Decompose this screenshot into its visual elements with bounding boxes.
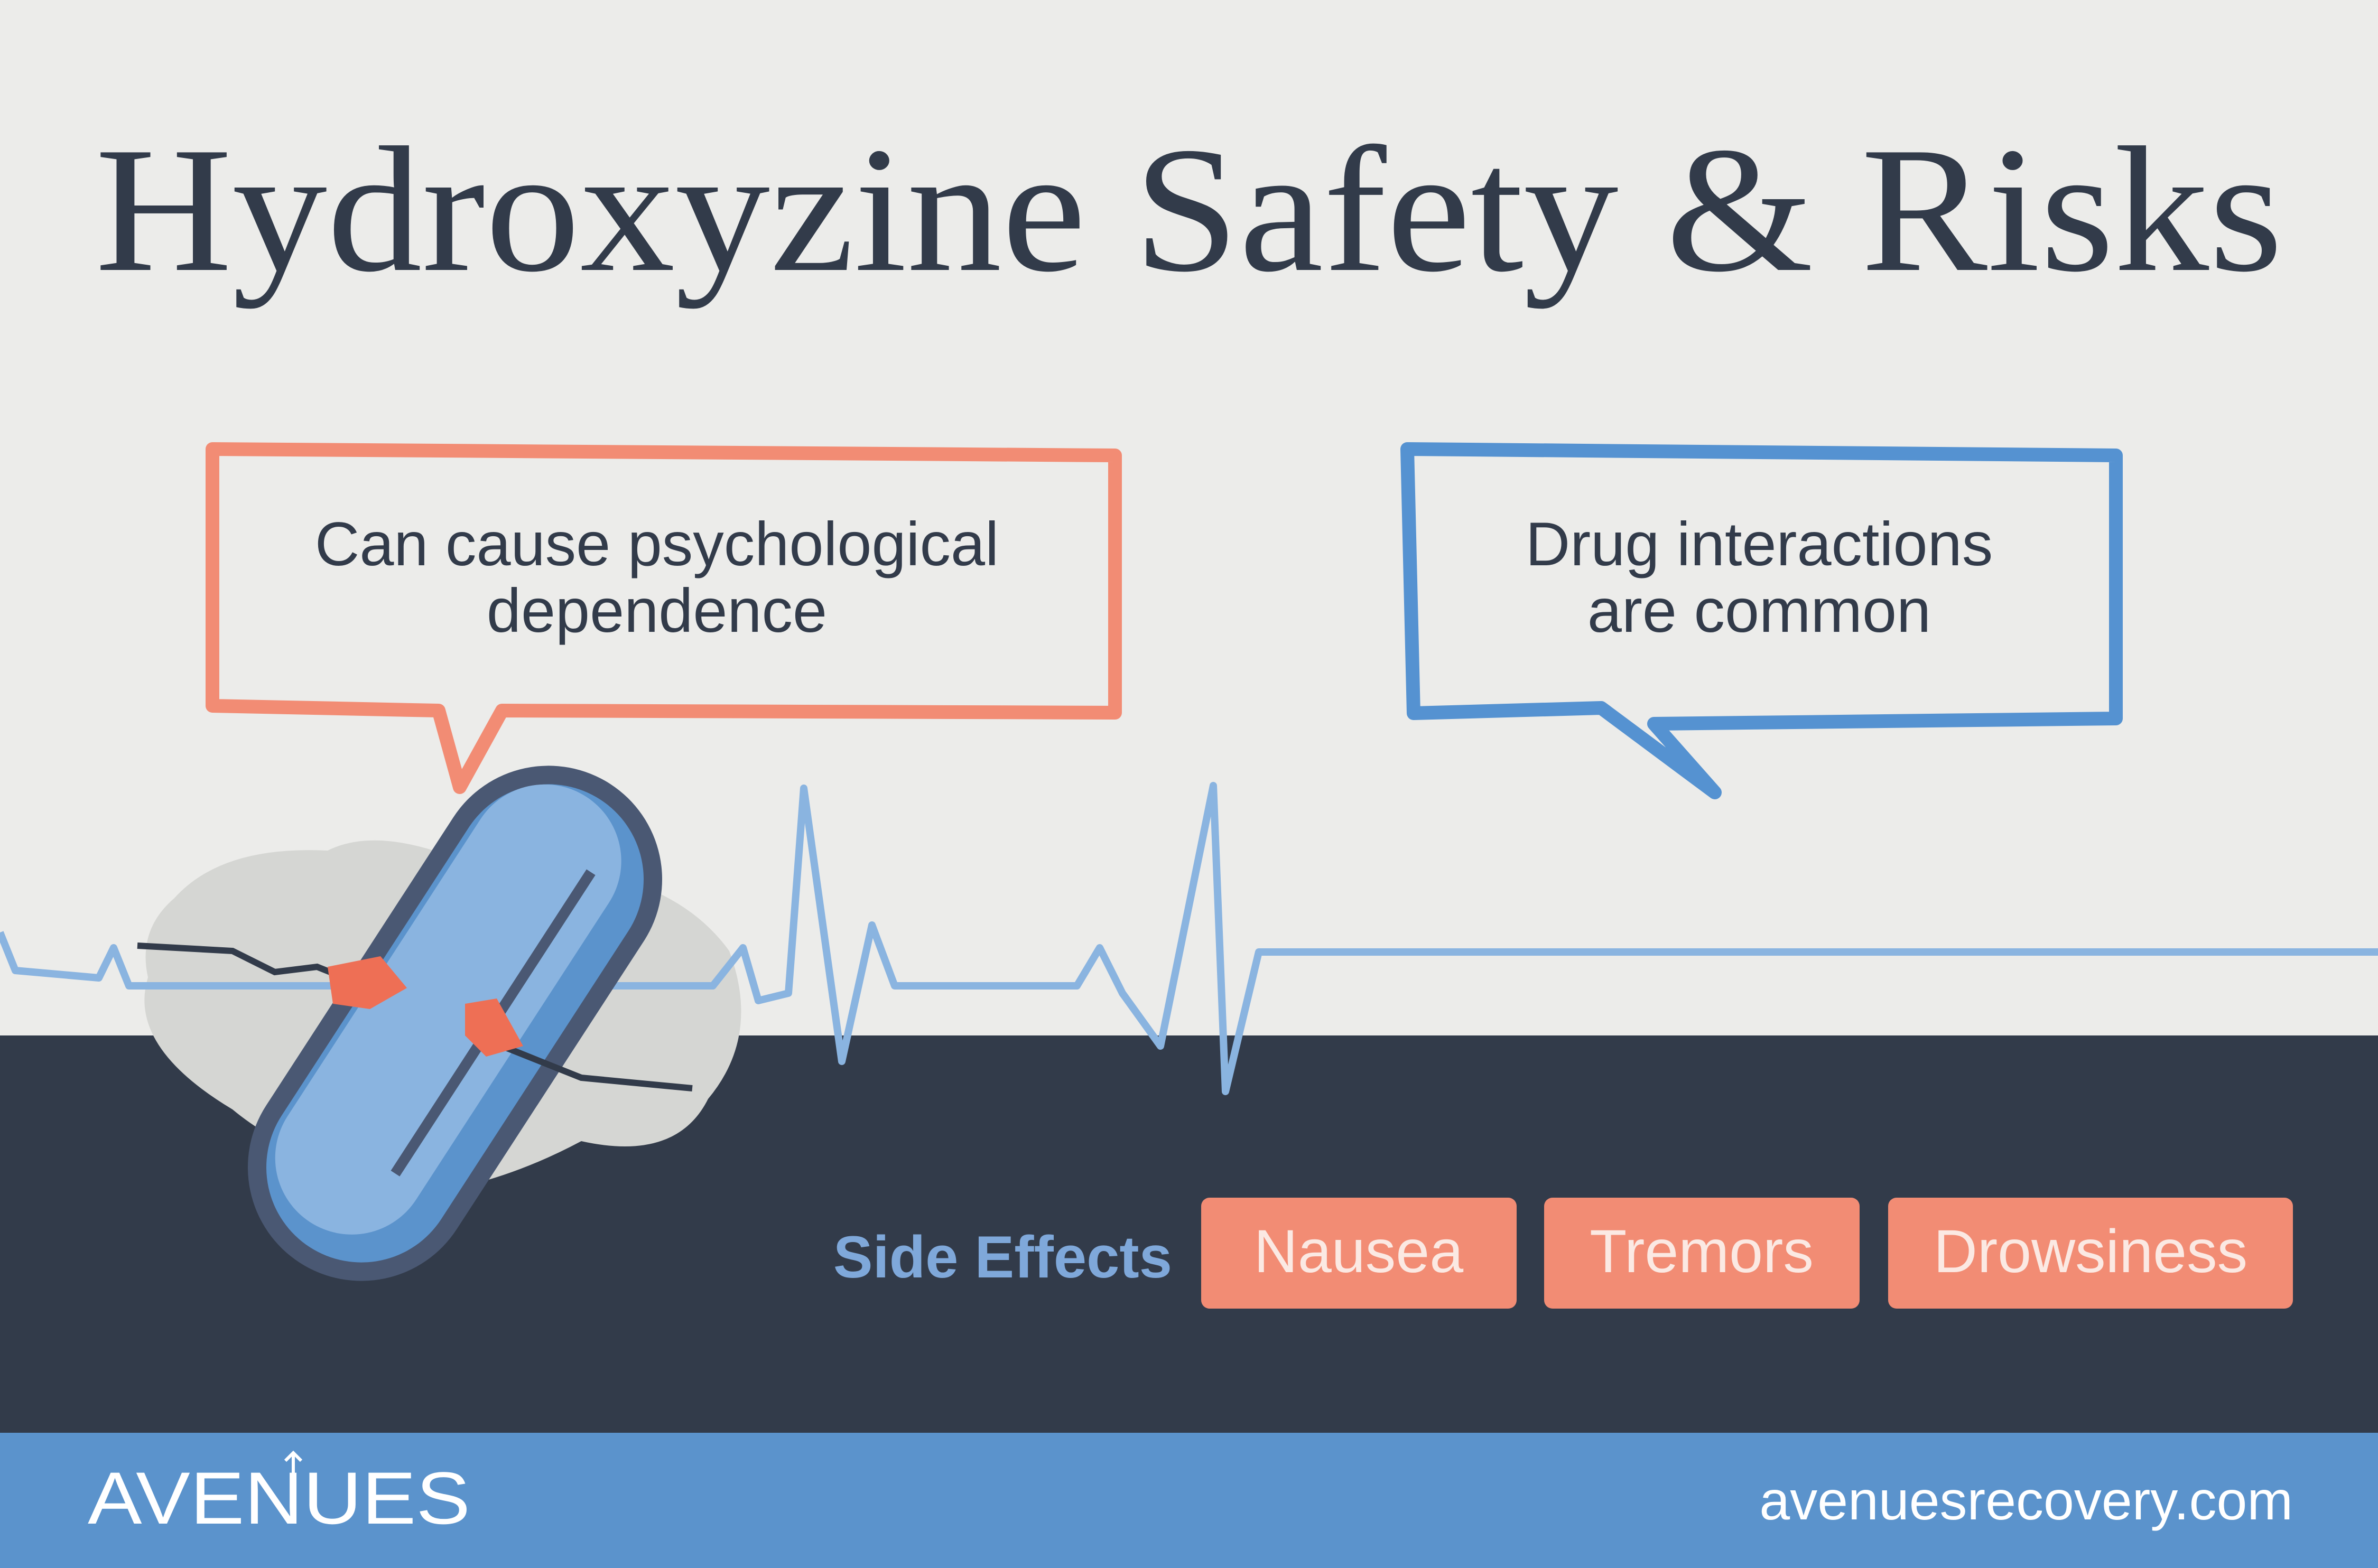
- tag: Tremors: [1544, 1198, 1860, 1309]
- callout: drug interactions: Drug interactions: [1526, 509, 1993, 578]
- footer bar: [0, 1433, 2378, 1568]
- tag: Tremors: Tremors: [1590, 1218, 1814, 1285]
- logo: AVENUES: AVENUES: [88, 1457, 470, 1539]
- callout: psychological dependence: Can cause psychological: [315, 509, 999, 578]
- icon: gray blob: [144, 841, 741, 1194]
- callout: drug interactions: [1407, 449, 2116, 792]
- tag: Nausea: [1201, 1198, 1517, 1309]
- callout: psychological dependence: dependence: [487, 576, 827, 645]
- callout: drug interactions: are common: [1587, 576, 1931, 645]
- tag: Drowsiness: Drowsiness: [1934, 1218, 2247, 1285]
- dark band: [0, 1035, 2378, 1433]
- icon: cracked pill: [137, 722, 705, 1324]
- title: Hydroxyzine Safety & Risks: [95, 110, 2283, 309]
- heartbeat line: [0, 786, 2378, 1091]
- side effects label: Side Effects: [833, 1224, 1172, 1290]
- tag: Nausea: Nausea: [1254, 1218, 1463, 1285]
- tag: Drowsiness: [1888, 1198, 2293, 1309]
- callout: psychological dependence: [212, 449, 1115, 787]
- footer url: avenuesrecovery.com: [1759, 1470, 2293, 1532]
